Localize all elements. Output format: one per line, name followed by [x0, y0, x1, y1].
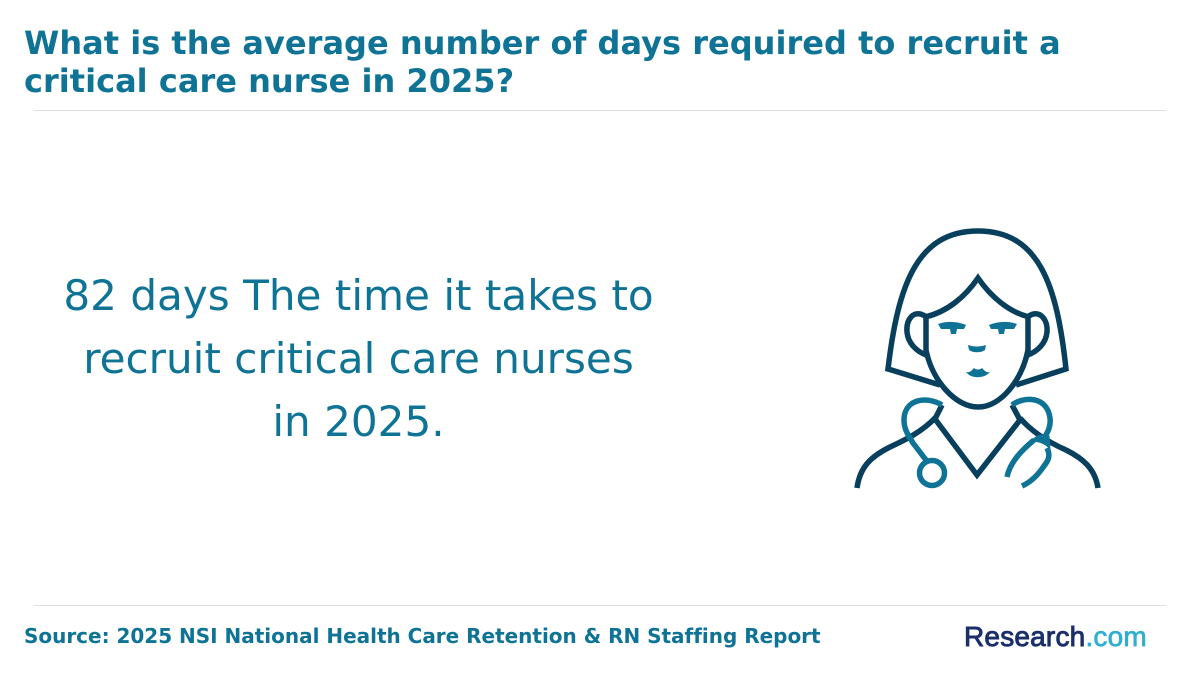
source line: Source: 2025 NSI National Health Care Retention & RN Staffing Report [24, 624, 821, 648]
face features [938, 322, 1017, 377]
logo: Research.com [964, 621, 1147, 652]
title [24, 24, 1061, 100]
stethoscope [904, 399, 1050, 486]
title: critical care nurse in 2025? [24, 62, 514, 100]
shoulders and collar [857, 405, 1098, 488]
statistic text: recruit critical care nurses [83, 334, 634, 383]
hair and face outline [888, 231, 1066, 407]
statistic text: 82 days The time it takes to [63, 271, 654, 320]
statistic text: in 2025. [272, 397, 445, 446]
statistic text [63, 271, 654, 446]
title: What is the average number of days required to recruit a [24, 24, 1061, 62]
